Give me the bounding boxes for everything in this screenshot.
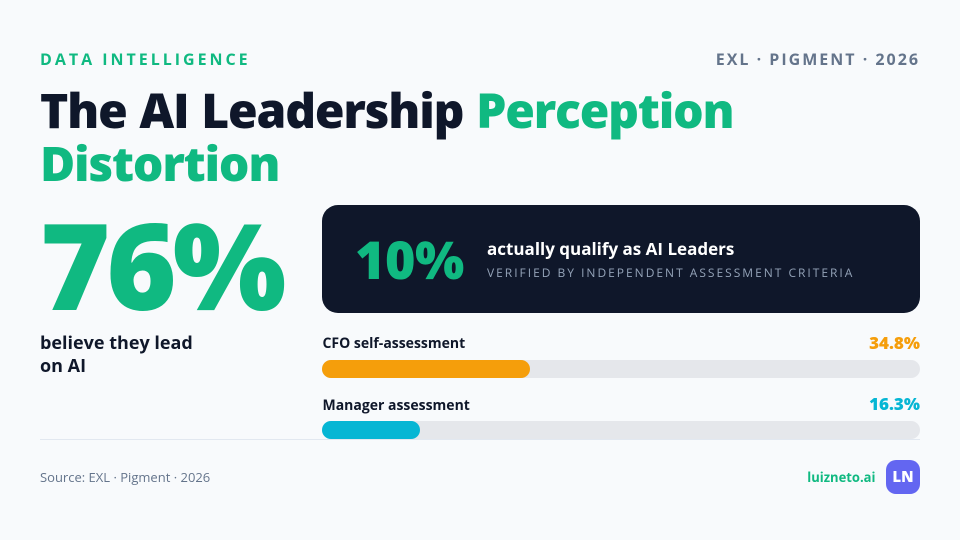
bar fill — [322, 360, 530, 378]
eyebrow: data intelligence: DATA INTELLIGENCE — [40, 48, 251, 70]
bar label: Manager assessment — [322, 396, 470, 415]
panel: 10% qualify — [322, 205, 920, 313]
footer brand name: luizneto.ai — [807, 468, 876, 486]
panel subtext: VERIFIED BY INDEPENDENT ASSESSMENT CRITERIA — [487, 264, 854, 281]
bar row: Manager assessment — [322, 392, 920, 439]
source tag: top right: EXL · PIGMENT · 2026 — [716, 48, 920, 70]
panel heading: actually qualify as AI Leaders — [487, 237, 734, 260]
big stat caption: on AI — [40, 354, 86, 378]
bar row: CFO self-assessment — [322, 331, 920, 378]
icon: LN logo — [886, 460, 920, 494]
bar fill — [322, 421, 420, 439]
icon: LN logo: LN — [892, 467, 914, 487]
title: Distortion — [40, 131, 279, 196]
bar track — [322, 421, 920, 439]
bar track — [322, 360, 920, 378]
big stat: 76%: 76% — [40, 183, 282, 346]
bar value: 16.3% — [869, 392, 920, 415]
big stat caption: believe they lead — [40, 331, 193, 355]
stat: 10%: 10% — [355, 224, 464, 295]
footer source: Source: EXL · Pigment · 2026 — [40, 468, 210, 486]
bar label: CFO self-assessment — [322, 334, 465, 353]
big stat caption — [40, 331, 193, 378]
bar value: 34.8% — [869, 331, 920, 354]
title: The AI Leadership Perception — [40, 78, 733, 143]
title — [40, 78, 733, 196]
